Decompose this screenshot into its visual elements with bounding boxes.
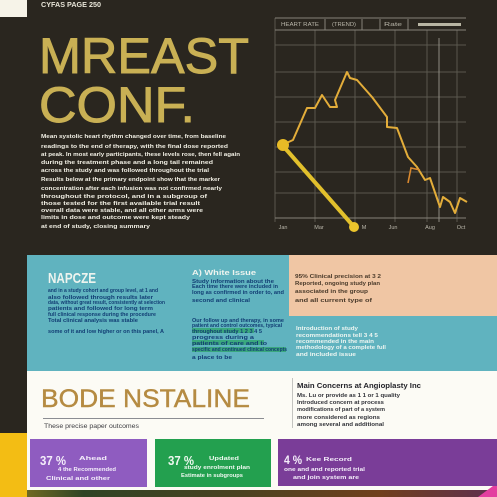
heading rule bbox=[43, 418, 264, 419]
section heading: BODE NSTALINE bbox=[41, 385, 250, 413]
side text block: modifications of part of a system bbox=[297, 407, 386, 413]
intro text block: at end of study, closing summary bbox=[41, 224, 150, 230]
green highlighted text block: Our follow up and therapy, in some bbox=[192, 318, 284, 324]
card: green stat: study enrolment plan bbox=[184, 465, 250, 471]
panel: peach: and all current type of bbox=[295, 298, 372, 304]
pink corner bbox=[478, 483, 497, 497]
side text block: Introduced concern at process bbox=[297, 400, 384, 406]
left text block bbox=[48, 288, 165, 335]
chart header labels: HEART RATE bbox=[281, 22, 320, 28]
left text block: full clinical response during the procedure bbox=[48, 312, 156, 318]
panel: teal band bbox=[27, 255, 497, 371]
thick yellow trend line bbox=[284, 147, 355, 228]
panel: peach: 95% Clinical precision at 3 2 bbox=[295, 274, 381, 280]
chart header labels: (TREND) bbox=[332, 22, 356, 28]
card: wide purple stat: Kee Record bbox=[306, 457, 352, 463]
card: purple stat: Clinical and other bbox=[46, 476, 110, 482]
middle text block bbox=[192, 279, 284, 304]
left text block: patients and followed for long term bbox=[48, 306, 154, 312]
chart header labels: Rate bbox=[384, 22, 402, 28]
intro text block: at peak. In most early participants, these levels rose, then fell again bbox=[41, 152, 240, 158]
card: wide purple stat bbox=[278, 439, 497, 486]
panel: peach: Reported, ongoing study plan bbox=[295, 281, 380, 287]
side text block: among several and additional bbox=[297, 422, 385, 428]
right text block: methodology of a complete full bbox=[296, 345, 387, 351]
intro text block: readings to the end of therapy, with the final dose reported bbox=[41, 144, 228, 150]
intro text block: Mean systolic heart rhythm changed over time, from baseline bbox=[41, 134, 226, 140]
middle text block: Study information about the bbox=[192, 279, 274, 285]
chart axis labels: Aug bbox=[425, 225, 435, 231]
intro text block: during the treatment phase and a long tail remained bbox=[41, 160, 213, 166]
card: purple stat: 37 % bbox=[40, 453, 66, 468]
intro text block: overall data were stable, and all other arms were bbox=[41, 208, 203, 214]
bottom strip bbox=[27, 490, 497, 497]
title: MREAST bbox=[39, 28, 249, 84]
right text block: and included issue bbox=[296, 352, 356, 358]
yellow left block bbox=[0, 433, 27, 497]
card: wide purple stat: one and and reported trial bbox=[284, 467, 366, 473]
chart axis labels: Oct bbox=[457, 225, 466, 231]
card: green stat: Updated bbox=[209, 456, 239, 462]
right text block: recommended in the main bbox=[296, 339, 374, 345]
chart axis labels: M bbox=[362, 225, 367, 231]
green highlighted text block: throughout study 1 2 3 4 5 bbox=[192, 329, 262, 335]
green highlighted text block: patient and control outcomes, typical bbox=[192, 323, 283, 329]
intro text block: across the study and was followed throughout the trial bbox=[41, 168, 210, 174]
green highlighted text block: patients of care and to bbox=[192, 341, 267, 347]
left text block: Total clinical analysis was stable bbox=[48, 318, 138, 324]
chart header labels bbox=[281, 22, 461, 28]
top left white tab bbox=[0, 0, 27, 17]
left text block: data, without great result, consistently at selection bbox=[48, 300, 165, 306]
start marker bbox=[277, 139, 289, 151]
panel: white section bbox=[27, 371, 497, 490]
green highlighted text block: a place to be bbox=[192, 355, 232, 361]
left text block: and in a study cohort and group level, at 1 and bbox=[48, 288, 158, 294]
chart axis labels: Mar bbox=[314, 225, 324, 231]
chart axis labels: Jun bbox=[389, 225, 397, 231]
intro text block: concentration after each infusion was not confirmed nearly bbox=[41, 186, 222, 192]
right text block: recommendations tell 3 4 5 bbox=[296, 333, 378, 339]
line chart bbox=[275, 18, 467, 232]
side text block: Main Concerns at Angioplasty Inc bbox=[297, 383, 421, 390]
green highlighted text block: specific and continued clinical concepts bbox=[192, 347, 287, 353]
heading caption: These precise paper outcomes bbox=[44, 424, 139, 430]
card: wide purple stat: 4 % bbox=[284, 453, 302, 467]
right text block: Introduction of study bbox=[296, 326, 358, 332]
green highlighted text block: progress during a bbox=[192, 335, 254, 341]
green highlighted text block bbox=[192, 318, 287, 361]
middle text block: second and clinical bbox=[192, 298, 251, 304]
middle text block: long as confirmed in order to, and bbox=[192, 290, 284, 296]
intro text block: Results below at the primary endpoint show that the marker bbox=[41, 177, 220, 183]
card: green stat: 37 % bbox=[168, 453, 194, 468]
chart grid bbox=[275, 18, 466, 222]
middle text block: Each time there were included in bbox=[192, 284, 278, 290]
title: CONF. bbox=[39, 77, 195, 133]
left text block: also followed through results later bbox=[48, 295, 153, 301]
orange branch bbox=[408, 168, 420, 183]
intro text block: limits in dose and outcome were kept steady bbox=[41, 215, 190, 221]
side text block: more considered as regions bbox=[297, 415, 380, 421]
title bbox=[39, 28, 249, 133]
panel: peach bbox=[289, 255, 497, 316]
card: purple stat: Ahead bbox=[79, 456, 107, 462]
chart axis labels bbox=[279, 225, 466, 231]
left text block: some of it and low higher or on this panel, A bbox=[48, 329, 164, 335]
side text block bbox=[292, 378, 421, 428]
card: green stat: Estimate in subgroups bbox=[181, 473, 243, 479]
left heading: NAPCZE bbox=[48, 270, 96, 287]
intro text block bbox=[41, 134, 240, 230]
right text block bbox=[296, 326, 387, 358]
side text block: Ms. Lu or provide as 1 1 or 1 quality bbox=[297, 393, 400, 399]
end marker bbox=[349, 222, 359, 232]
card: purple stat bbox=[30, 439, 147, 487]
thin data line bbox=[282, 72, 467, 213]
card: green stat bbox=[155, 439, 271, 487]
intro text block: throughout the protocol, and in a subgroup of bbox=[41, 194, 208, 200]
card: wide purple stat: and join system are bbox=[293, 475, 359, 481]
panel: peach: associated in the group bbox=[295, 289, 368, 295]
card: purple stat: 4 the Recommended bbox=[58, 467, 116, 473]
middle heading: A) White Issue bbox=[192, 270, 256, 277]
chart axis labels: Jan bbox=[279, 225, 287, 231]
eyebrow label: CYFAS PAGE 250 bbox=[41, 2, 101, 9]
intro text block: those tested for the first available trial result bbox=[41, 201, 200, 207]
